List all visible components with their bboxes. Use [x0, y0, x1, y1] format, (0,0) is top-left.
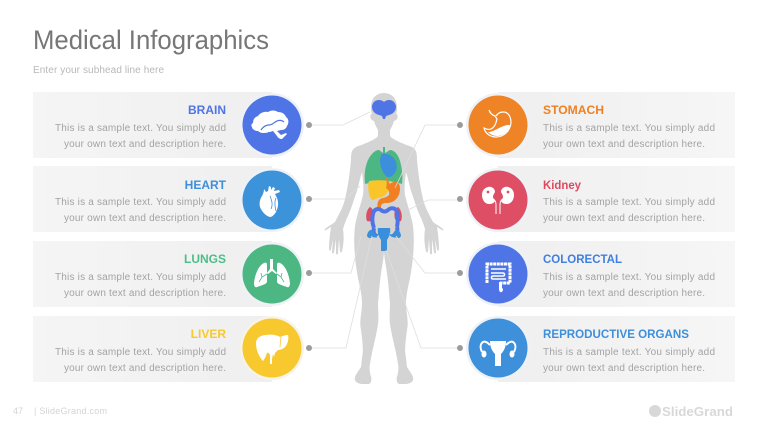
icon: lungs	[240, 242, 304, 306]
connector dot: lungs	[306, 270, 312, 276]
body silhouette	[325, 93, 443, 384]
connector: brain	[309, 112, 370, 125]
heading: brain: BRAIN	[188, 103, 226, 117]
connector: stomach	[395, 125, 460, 188]
connector: liver	[309, 236, 372, 348]
description: lungs: your own text and description here.	[64, 288, 226, 299]
connector: lungs	[309, 236, 361, 273]
description: colorectal: your own text and description here.	[543, 288, 705, 299]
description: heart	[55, 197, 226, 224]
connector: heart	[309, 186, 360, 199]
organ: kidneys	[366, 207, 402, 221]
description: heart: This is a sample text. You simply add	[55, 197, 226, 208]
heading: heart: HEART	[185, 178, 227, 192]
description: reproductive organs: your own text and description here.	[543, 363, 705, 374]
description: stomach: This is a sample text. You simply add	[543, 123, 715, 134]
panel: brain	[33, 92, 312, 158]
connector: reproductive organs	[386, 250, 460, 348]
icon: reproductive organs	[466, 316, 530, 380]
connector: kidney	[408, 200, 460, 210]
description: reproductive organs	[543, 347, 715, 374]
organ: lungs	[365, 147, 402, 184]
description: lungs: This is a sample text. You simply add	[55, 272, 226, 283]
heading: reproductive organs: REPRODUCTIVE ORGANS	[543, 327, 689, 341]
panel: liver	[33, 316, 312, 382]
title: Medical Infographics	[33, 25, 269, 55]
description: stomach	[543, 123, 715, 150]
connector dot: colorectal	[457, 270, 463, 276]
icon: kidney	[466, 168, 530, 232]
connector dot: stomach	[457, 122, 463, 128]
description: heart: your own text and description here.	[64, 213, 226, 224]
description: brain: your own text and description here.	[64, 139, 226, 150]
description: brain: This is a sample text. You simply add	[55, 123, 226, 134]
icon: stomach	[466, 93, 530, 157]
connector dot: heart	[306, 196, 312, 202]
panel: stomach	[457, 92, 735, 158]
description: liver: your own text and description here.	[64, 363, 226, 374]
connector dot: brain	[306, 122, 312, 128]
panel: lungs	[33, 241, 312, 307]
icon: heart	[240, 168, 304, 232]
heading: stomach: STOMACH	[543, 103, 604, 117]
panel: heart	[33, 166, 312, 232]
heading: kidney: Kidney	[543, 178, 581, 192]
connector dot: kidney	[457, 196, 463, 202]
organ: liver	[368, 180, 391, 200]
footer: logo: SlideGrand	[662, 404, 733, 419]
description: liver: This is a sample text. You simply add	[55, 347, 226, 358]
heading: colorectal: COLORECTAL	[543, 252, 622, 266]
panel: colorectal	[457, 241, 735, 307]
description: kidney	[543, 197, 715, 224]
subheading: Enter your subhead line here	[33, 65, 164, 76]
footer: page number: 47	[13, 406, 23, 416]
panel: kidney	[457, 166, 735, 232]
organ: colon	[372, 208, 398, 236]
footer: site: | SlideGrand.com	[34, 406, 107, 416]
organ: uterus and tubes	[367, 228, 401, 251]
heading: lungs: LUNGS	[184, 252, 226, 266]
icon: liver	[240, 316, 304, 380]
icon: colorectal	[466, 242, 530, 306]
organ: brain	[372, 100, 396, 119]
panel: reproductive organs	[457, 316, 735, 382]
description: colorectal	[543, 272, 715, 299]
description: lungs	[55, 272, 226, 299]
connector: colorectal	[396, 236, 460, 273]
human body figure	[325, 93, 443, 384]
description: brain	[55, 123, 226, 150]
heading: liver: LIVER	[191, 327, 226, 341]
organ: stomach	[377, 178, 400, 210]
connector dot: reproductive organs	[457, 345, 463, 351]
organ: heart	[380, 154, 397, 177]
description: colorectal: This is a sample text. You simply add	[543, 272, 715, 283]
description: reproductive organs: This is a sample text. You simply add	[543, 347, 715, 358]
description: kidney: This is a sample text. You simply add	[543, 197, 715, 208]
connector dot: liver	[306, 345, 312, 351]
icon: brain	[240, 93, 304, 157]
description: kidney: your own text and description here.	[543, 213, 705, 224]
description: stomach: your own text and description here.	[543, 139, 705, 150]
description: liver	[55, 347, 226, 374]
